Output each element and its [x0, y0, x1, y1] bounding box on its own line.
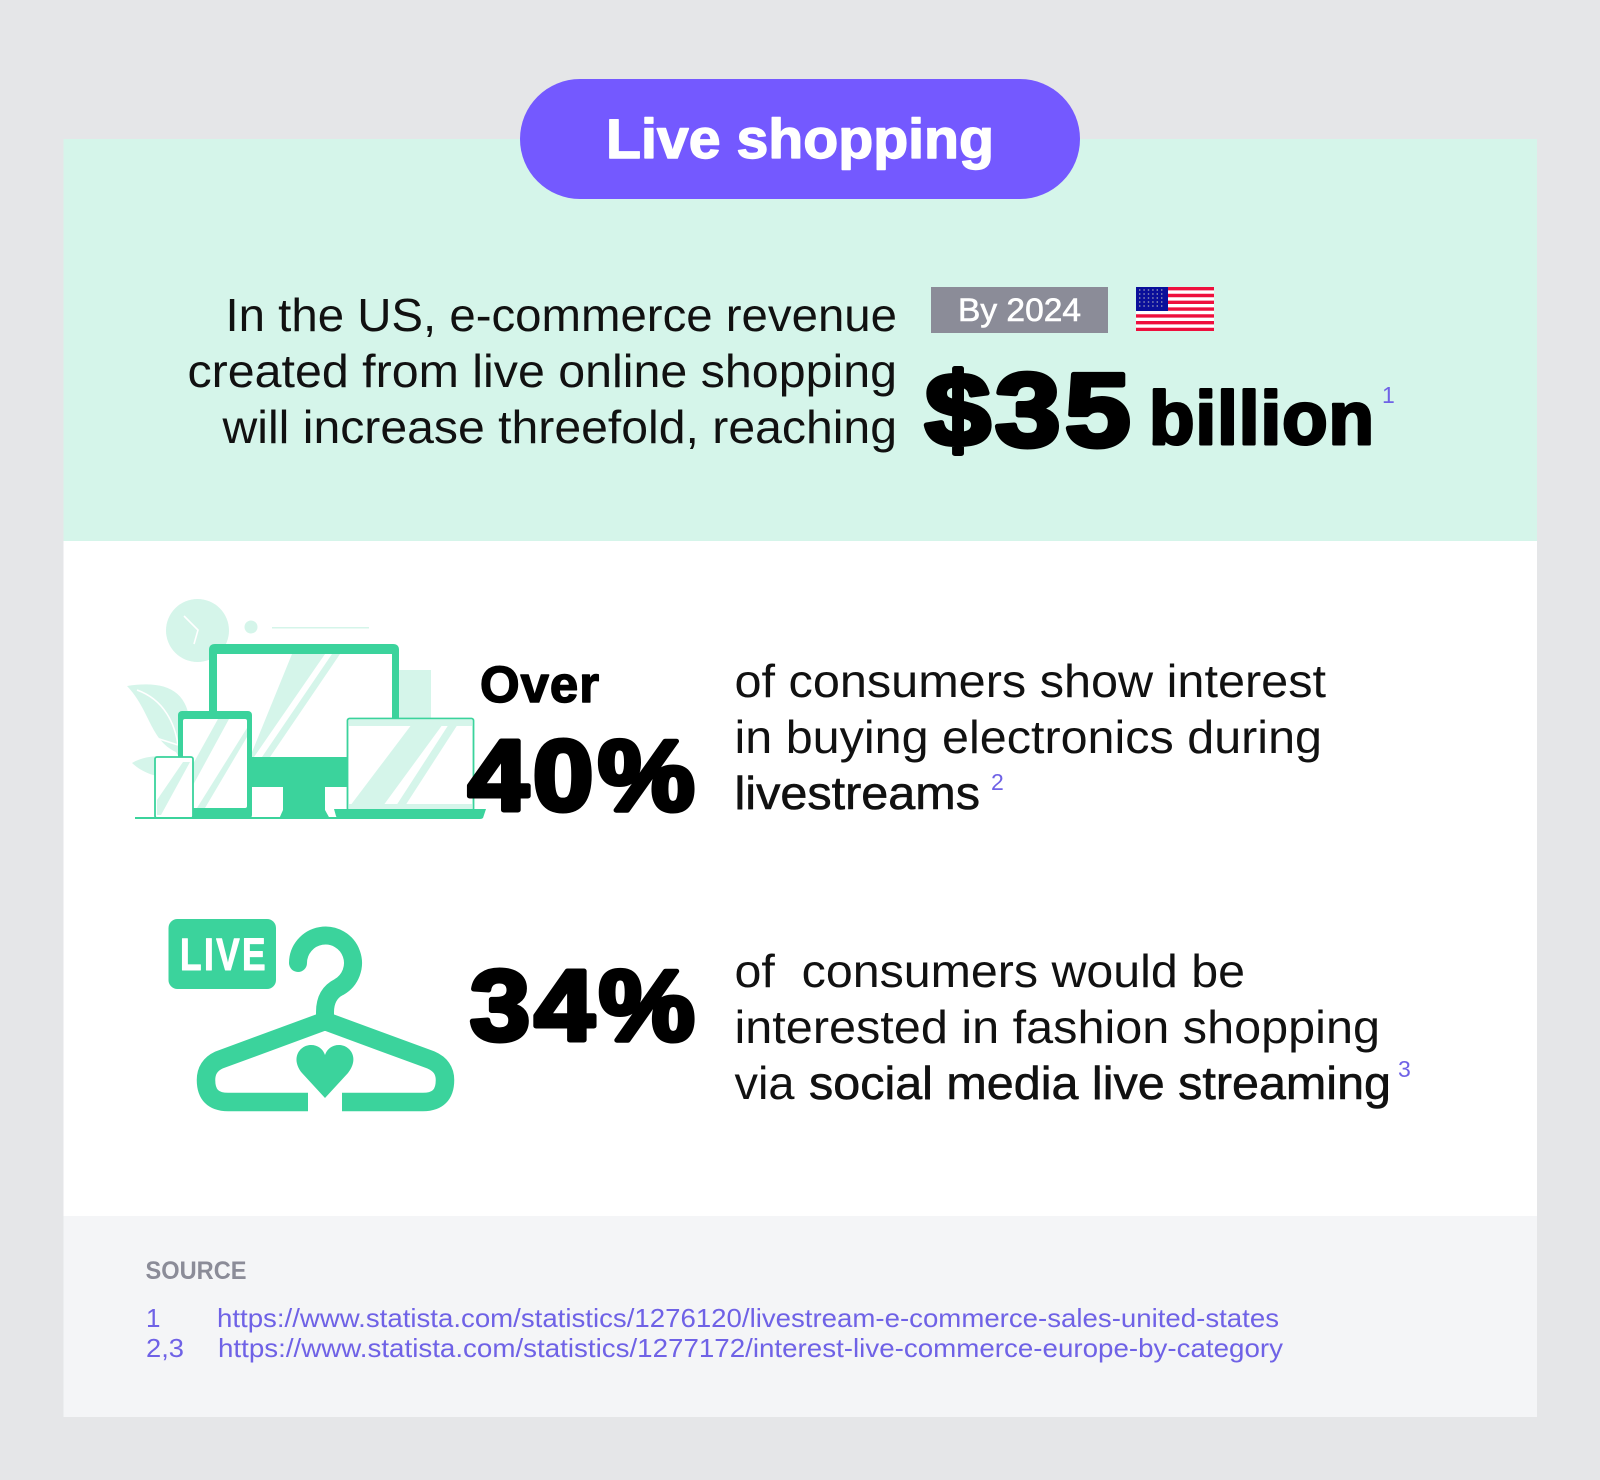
panel: source footer	[64, 1216, 1537, 1417]
footnote marker 1: 1	[1382, 382, 1395, 408]
stat description: fashion	[734, 945, 1411, 1109]
stat: Over 40%	[468, 656, 699, 832]
ground line	[135, 817, 355, 819]
stat: 34%: 34%	[470, 950, 699, 1062]
icon: US flag	[1136, 287, 1214, 331]
stat description: fashion: via	[734, 1057, 795, 1109]
stat description: electronics: 2	[991, 769, 1004, 795]
icon: LIVE tag and hanger	[168, 919, 445, 1102]
headline text block	[188, 289, 897, 453]
stat description: electronics: in buying electronics during	[734, 711, 1322, 763]
headline text block: In the US, e-commerce revenue	[226, 289, 897, 341]
big figure: $35 billion	[925, 353, 1375, 469]
phone	[155, 757, 193, 818]
stat description: electronics	[734, 655, 1326, 819]
icon: LIVE tag and hanger: LIVE	[180, 929, 268, 980]
stat description: fashion: 3	[1398, 1056, 1411, 1082]
source links: https://www.statista.com/statistics/1276120/livestream-e-commerce-sales-united-states	[217, 1303, 1279, 1333]
title pill	[520, 79, 1080, 199]
icon: devices illustration	[127, 599, 486, 819]
stat description: fashion: interested in fashion shopping	[734, 1001, 1380, 1053]
source links: 1	[146, 1303, 160, 1333]
panel: mint headline band	[64, 139, 1537, 541]
headline text block: created from live online shopping	[188, 345, 897, 397]
source links: https://www.statista.com/statistics/1277172/interest-live-commerce-europe-by-category	[218, 1333, 1283, 1363]
source links	[146, 1303, 1283, 1363]
stat description: fashion: of consumers would be	[734, 945, 1245, 997]
stat description: fashion: social media live streaming	[809, 1057, 1391, 1109]
year badge: By 2024	[958, 292, 1081, 328]
stat description: electronics: of consumers show interest	[734, 655, 1326, 707]
tablet	[178, 711, 252, 819]
stat description: electronics: livestreams	[734, 767, 980, 819]
laptop	[348, 718, 474, 810]
source heading: SOURCE	[146, 1257, 246, 1285]
stat: Over 40%: 40%	[468, 720, 699, 832]
year badge	[931, 287, 1108, 333]
plant leaves	[127, 684, 190, 778]
panel: white card	[64, 139, 1537, 1417]
big figure: $35 billion: billion	[1149, 376, 1375, 460]
headline text block: will increase threefold, reaching	[221, 401, 897, 453]
clock decoration	[166, 599, 431, 719]
big figure: $35 billion: $35	[925, 353, 1135, 469]
desktop monitor	[209, 644, 399, 760]
stat: Over 40%: Over	[480, 656, 600, 713]
title pill: Live shopping	[606, 107, 994, 170]
source links: 2,3	[146, 1333, 184, 1363]
